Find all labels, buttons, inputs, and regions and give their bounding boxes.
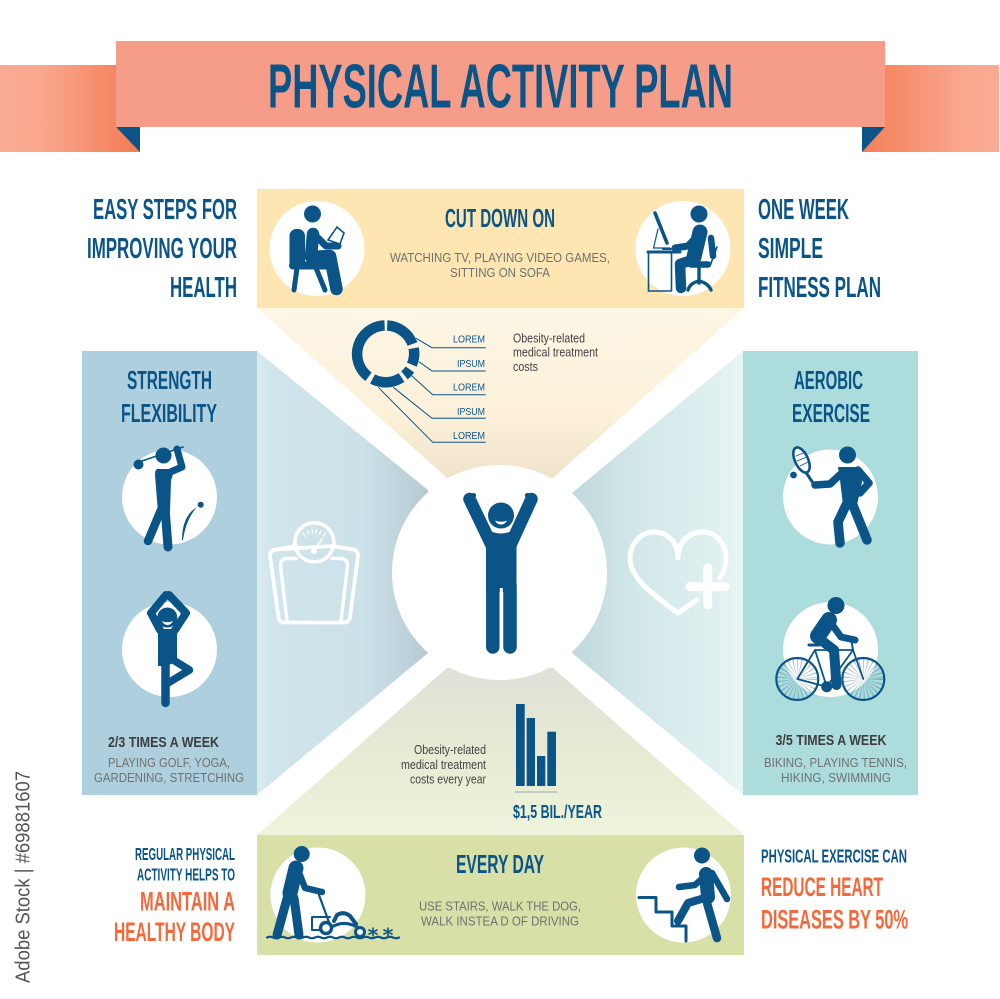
text: cut down on details: WATCHING TV, PLAYING VIDEO GAMES, bbox=[390, 250, 610, 265]
panel: aerobic exercise bbox=[743, 351, 918, 795]
text: 3/5 times a week: 3/5 TIMES A WEEK bbox=[776, 732, 887, 749]
right heading: one week plan: SIMPLE bbox=[758, 233, 823, 265]
legend labels: IPSUM bbox=[457, 406, 485, 418]
heading: aerobic exercise: AEROBIC bbox=[794, 365, 863, 395]
icon: heart with plus bbox=[630, 532, 726, 613]
heading: strength flexibility: STRENGTH bbox=[127, 365, 212, 395]
text: obesity-related costs: medical treatment bbox=[513, 346, 598, 360]
icon: tennis player bbox=[783, 445, 878, 544]
ribbon main band bbox=[116, 41, 885, 127]
right heading: one week plan bbox=[758, 194, 881, 304]
panel background: top fade bbox=[257, 308, 744, 478]
panel: cut down on bbox=[257, 189, 744, 308]
ribbon right fold bbox=[862, 127, 885, 152]
text: regular activity callout: ACTIVITY HELPS TO bbox=[137, 865, 235, 885]
heading: aerobic exercise: EXERCISE bbox=[792, 398, 870, 428]
text: cut down on details: SITTING ON SOFA bbox=[450, 265, 550, 280]
heading: aerobic exercise bbox=[792, 365, 870, 428]
text: obesity costs every year bbox=[401, 743, 486, 787]
panel background: left fade bbox=[257, 351, 428, 795]
icon: yoga pose bbox=[122, 595, 217, 703]
text: regular activity callout: HEALTHY BODY bbox=[114, 917, 235, 947]
text: aerobic activities: HIKING, SWIMMING bbox=[781, 770, 891, 785]
heading: every day: EVERY DAY bbox=[456, 849, 544, 879]
legend labels: LOREM bbox=[453, 334, 485, 346]
text: obesity-related costs: Obesity-related bbox=[513, 332, 585, 346]
text: obesity costs every year: medical treatment bbox=[401, 758, 486, 772]
text: obesity-related costs bbox=[513, 332, 598, 374]
panel: strength and flexibility bbox=[82, 351, 257, 795]
legend labels bbox=[453, 334, 485, 442]
text: heart disease callout: DISEASES BY 50% bbox=[761, 905, 908, 935]
text: regular activity callout bbox=[114, 844, 235, 947]
text: 2/3 times a week: 2/3 TIMES A WEEK bbox=[108, 734, 219, 751]
icon: person at computer bbox=[636, 201, 730, 296]
text: heart disease callout bbox=[761, 846, 908, 935]
leader lines bbox=[378, 338, 486, 442]
icon: person reading in chair bbox=[270, 201, 364, 296]
text: obesity costs every year: Obesity-related bbox=[414, 743, 486, 757]
text: aerobic activities bbox=[764, 755, 907, 785]
ribbon banner bbox=[0, 41, 999, 152]
heading: strength flexibility: FLEXIBILITY bbox=[121, 398, 217, 428]
panel background: bottom fade bbox=[257, 668, 744, 835]
side credit text: Adobe Stock | #69881607 bbox=[12, 771, 34, 983]
text: cut down on details bbox=[390, 250, 610, 280]
heading: cut down on: CUT DOWN ON bbox=[445, 203, 555, 233]
ribbon left fold bbox=[116, 127, 140, 152]
text: obesity-related costs: costs bbox=[513, 360, 538, 374]
text: every day details: WALK INSTEA D OF DRIVING bbox=[421, 914, 579, 929]
bar chart bbox=[515, 704, 558, 792]
donut chart with labels bbox=[357, 326, 486, 442]
icon: golfer bbox=[122, 447, 217, 547]
panel: every day bbox=[257, 835, 744, 955]
text: heart disease callout: REDUCE HEART bbox=[761, 872, 883, 902]
left heading: easy steps: IMPROVING YOUR bbox=[87, 233, 237, 265]
center circle bbox=[392, 465, 607, 680]
icon: person climbing stairs bbox=[636, 848, 731, 942]
text: regular activity callout: REGULAR PHYSICAL bbox=[135, 844, 235, 864]
text: every day details bbox=[419, 899, 581, 929]
right heading: one week plan: ONE WEEK bbox=[758, 194, 849, 226]
text: strength activities: GARDENING, STRETCHING bbox=[94, 770, 244, 785]
text: strength activities: PLAYING GOLF, YOGA, bbox=[108, 755, 230, 770]
right heading: one week plan: FITNESS PLAN bbox=[758, 272, 881, 304]
heading: strength flexibility bbox=[121, 365, 217, 428]
text: obesity costs every year: costs every year bbox=[410, 773, 486, 787]
ribbon left tail bbox=[0, 65, 140, 152]
icon: person mowing lawn bbox=[267, 846, 399, 942]
left heading: easy steps: EASY STEPS FOR bbox=[93, 194, 237, 226]
text: regular activity callout: MAINTAIN A bbox=[140, 887, 235, 917]
panel background: right fade bbox=[572, 351, 743, 795]
ribbon right tail bbox=[862, 65, 999, 152]
icon: happy person with raised arms bbox=[470, 493, 532, 648]
left heading: easy steps: HEALTH bbox=[170, 272, 237, 304]
text: every day details: USE STAIRS, WALK THE DOG, bbox=[419, 899, 581, 914]
icon: cyclist bbox=[776, 597, 884, 700]
text: heart disease callout: PHYSICAL EXERCISE CAN bbox=[761, 846, 907, 867]
text: strength activities bbox=[94, 755, 244, 785]
icon: weight scale bbox=[270, 523, 358, 622]
donut ring bbox=[357, 326, 414, 382]
legend labels: IPSUM bbox=[457, 358, 485, 370]
legend labels: LOREM bbox=[453, 430, 485, 442]
text: cost per year: $1,5 BIL./YEAR bbox=[513, 801, 602, 822]
text: aerobic activities: BIKING, PLAYING TENNIS, bbox=[764, 755, 907, 770]
left heading: easy steps bbox=[87, 194, 237, 304]
legend labels: LOREM bbox=[453, 382, 485, 394]
